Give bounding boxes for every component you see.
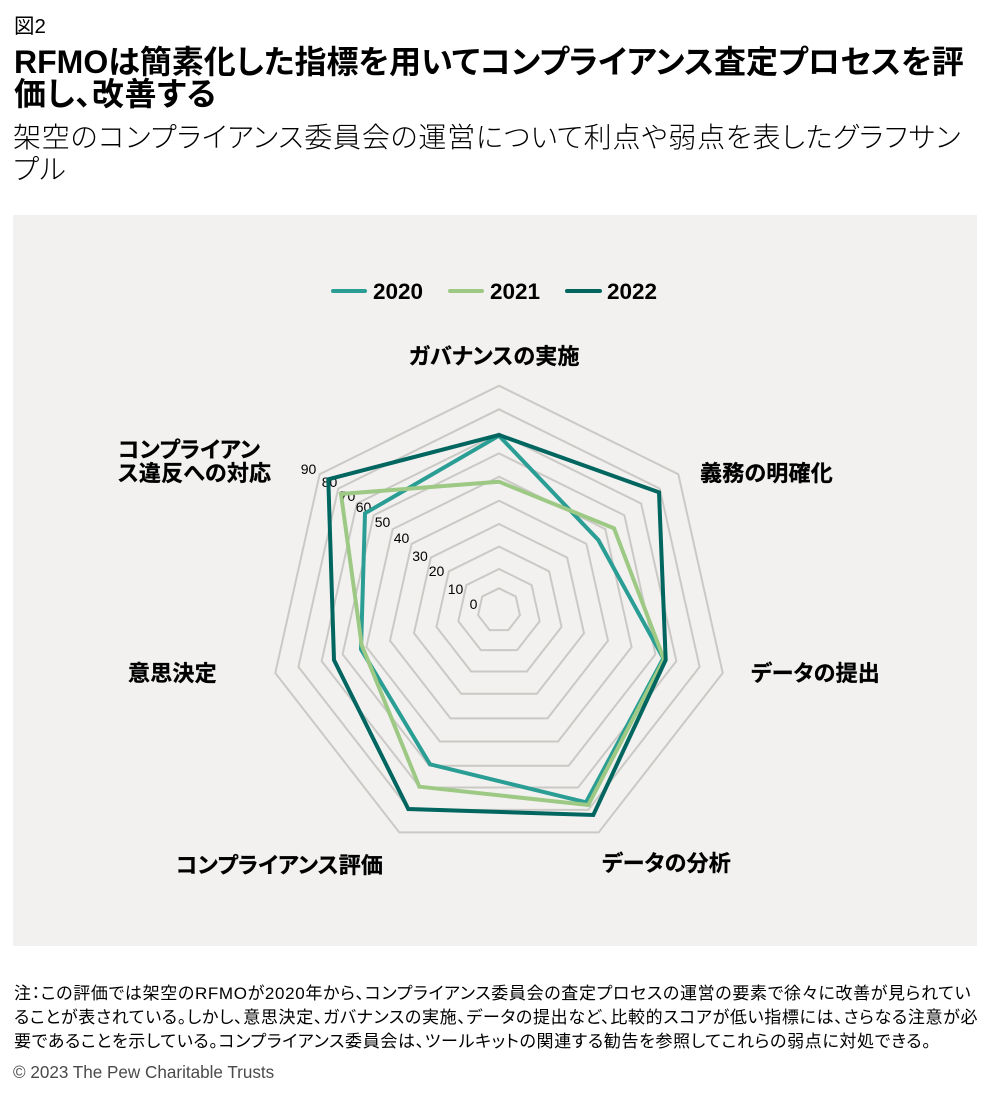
subtitle — [13, 122, 961, 185]
axis label: compliance assessment: コンプライアンス評価 — [176, 853, 383, 878]
legend: 2021 — [490, 279, 540, 304]
axis scale labels: 30 — [412, 548, 428, 564]
axis label: data analysis: データの分析 — [602, 851, 731, 876]
axis label: data submission: データの提出 — [751, 661, 880, 686]
axis scale labels — [301, 461, 478, 612]
axis label: obligations: 義務の明確化 — [700, 461, 833, 486]
axis scale labels: 40 — [394, 530, 409, 546]
title — [14, 44, 964, 112]
series 2021 — [341, 482, 664, 805]
axis scale labels: 70 — [340, 488, 355, 504]
note: ることが表されている。しかし、意思決定、ガバナンスの実施、データの提出など、比較的スコアが低い指標には、さらなる注意が必 — [14, 1008, 978, 1027]
title: RFMOは簡素化した指標を用いてコンプライアンス査定プロセスを評 — [14, 44, 964, 80]
axis scale labels: 50 — [375, 514, 390, 530]
axis label: response to violations — [118, 438, 271, 486]
series 2020 — [361, 436, 663, 802]
axis label: decision making: 意思決定 — [128, 661, 217, 686]
title: 価し、改善する — [14, 76, 217, 112]
note: 要であることを示している。コンプライアンス委員会は、ツールキットの関連する勧告を参照してこれらの弱点に対処できる。 — [14, 1032, 931, 1051]
subtitle: プル — [13, 154, 67, 185]
legend: 2022 — [607, 279, 657, 304]
axis scale labels: 80 — [322, 474, 337, 490]
axis label: response to violations: コンプライアン — [118, 438, 260, 462]
radar grid — [275, 386, 723, 832]
note: 注：この評価では架空のRFMOが2020年から、コンプライアンス委員会の査定プロセスの運営の要素で徐々に改善が見られてい — [14, 984, 971, 1003]
note — [14, 984, 978, 1051]
panel: chart background — [13, 215, 977, 946]
legend: 2020 — [373, 279, 423, 304]
legend — [333, 279, 657, 304]
figure number: 図2 — [14, 15, 46, 38]
axis scale labels: 90 — [301, 461, 316, 477]
axis label: response to violations: ス違反への対応 — [118, 461, 271, 486]
series 2022 — [328, 435, 666, 815]
axis scale labels: 20 — [429, 563, 444, 579]
axis scale labels: 60 — [356, 499, 371, 515]
axis scale labels: 0 — [470, 596, 478, 612]
axis label: governance: ガバナンスの実施 — [409, 344, 580, 369]
subtitle: 架空のコンプライアンス委員会の運営について利点や弱点を表したグラフサン — [13, 122, 961, 153]
copyright: © 2023 The Pew Charitable Trusts — [13, 1063, 274, 1082]
axis scale labels: 10 — [448, 581, 463, 597]
